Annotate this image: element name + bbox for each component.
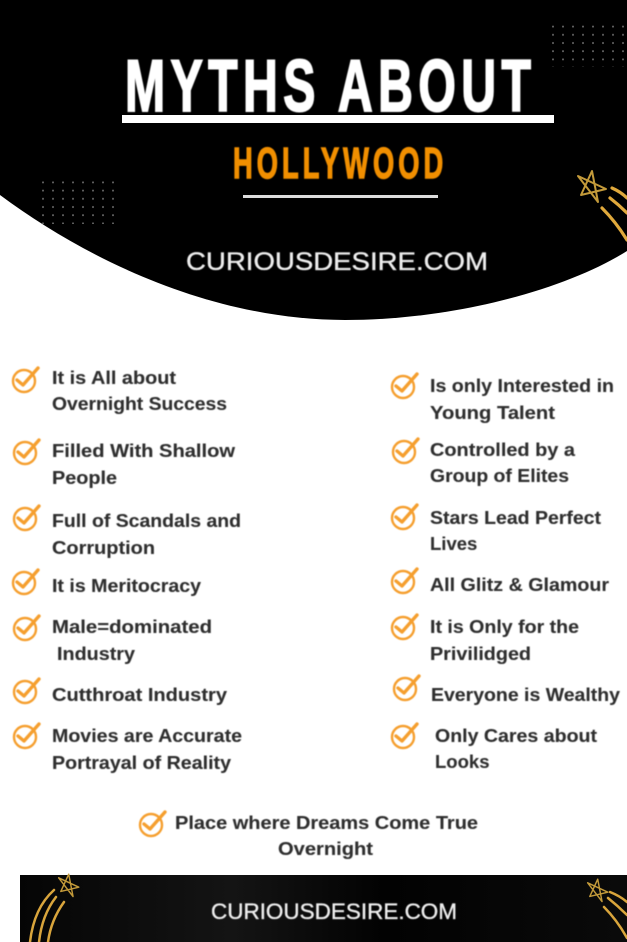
myth: male dominated: [14, 616, 212, 664]
myth: cutthroat: [14, 679, 228, 705]
myth: perfect lives: Stars Lead Perfect: [430, 507, 601, 528]
myth: meritocracy: It is Meritocracy: [52, 575, 202, 596]
myth: scandals: Corruption: [52, 537, 155, 558]
footer website label: CURIOUSDESIRE.COM: [211, 899, 457, 924]
bottom centered myth: Place where Dreams Come True: [175, 812, 478, 833]
bottom centered myth: Overnight: [278, 838, 373, 859]
myth: shallow people: Filled With Shallow: [52, 440, 236, 461]
icon: shooting star right: [588, 879, 627, 938]
icon: shooting star left: [30, 874, 79, 942]
title: Myths About: MYTHS ABOUT: [125, 46, 531, 128]
myth: shallow people: People: [52, 467, 117, 488]
subtitle divider: [243, 195, 438, 198]
footer banner: [20, 874, 627, 942]
dot pattern top right: [552, 20, 627, 67]
myth: glitz: [392, 569, 609, 595]
myth: scandals: Full of Scandals and: [52, 510, 241, 531]
myth: elites: Controlled by a: [430, 439, 576, 460]
myth: male dominated: Industry: [57, 643, 136, 664]
myth: cutthroat: Cutthroat Industry: [52, 684, 228, 705]
myth: young talent: [392, 374, 614, 423]
myth: male dominated: Male=dominated: [52, 616, 212, 637]
myth: overnight success: It is All about: [52, 367, 176, 388]
myth: glitz: All Glitz & Glamour: [430, 574, 609, 595]
bottom centered myth: [140, 812, 478, 859]
myth: privileged: Privilidged: [430, 643, 531, 664]
myth: young talent: Is only Interested in: [430, 375, 614, 396]
subtitle: Hollywood: HOLLYWOOD: [233, 138, 443, 188]
myth: elites: [393, 439, 576, 486]
myth: elites: Group of Elites: [430, 465, 569, 486]
myth: wealthy: Everyone is Wealthy: [431, 684, 621, 705]
website label: CURIOUSDESIRE.COM: [186, 248, 488, 276]
myth: privileged: [392, 615, 579, 664]
left column myths: [13, 367, 242, 773]
myth: looks: Only Cares about: [435, 725, 597, 746]
icon: shooting star: [578, 171, 627, 240]
right column myths: [392, 374, 621, 772]
myth: scandals: [14, 506, 241, 558]
myth: privileged: It is Only for the: [430, 616, 579, 637]
myth: wealthy: [394, 676, 621, 705]
myth: movies: Movies are Accurate: [52, 725, 242, 746]
myth: perfect lives: [392, 505, 601, 554]
myth: overnight success: [13, 367, 227, 414]
myth: shallow people: [14, 440, 236, 488]
list of myths: [13, 367, 621, 859]
myth: perfect lives: Lives: [430, 533, 477, 554]
myth: looks: Looks: [435, 751, 489, 772]
myth: movies: Portrayal of Reality: [52, 752, 232, 773]
myth: movies: [14, 724, 242, 773]
myth: overnight success: Overnight Success: [52, 393, 227, 414]
header: black curved banner: [0, 0, 627, 320]
dot pattern left: [42, 181, 120, 224]
myth: looks: [392, 724, 597, 772]
myth: young talent: Young Talent: [430, 402, 555, 423]
title underline: [122, 115, 554, 123]
myth: meritocracy: [13, 570, 202, 596]
